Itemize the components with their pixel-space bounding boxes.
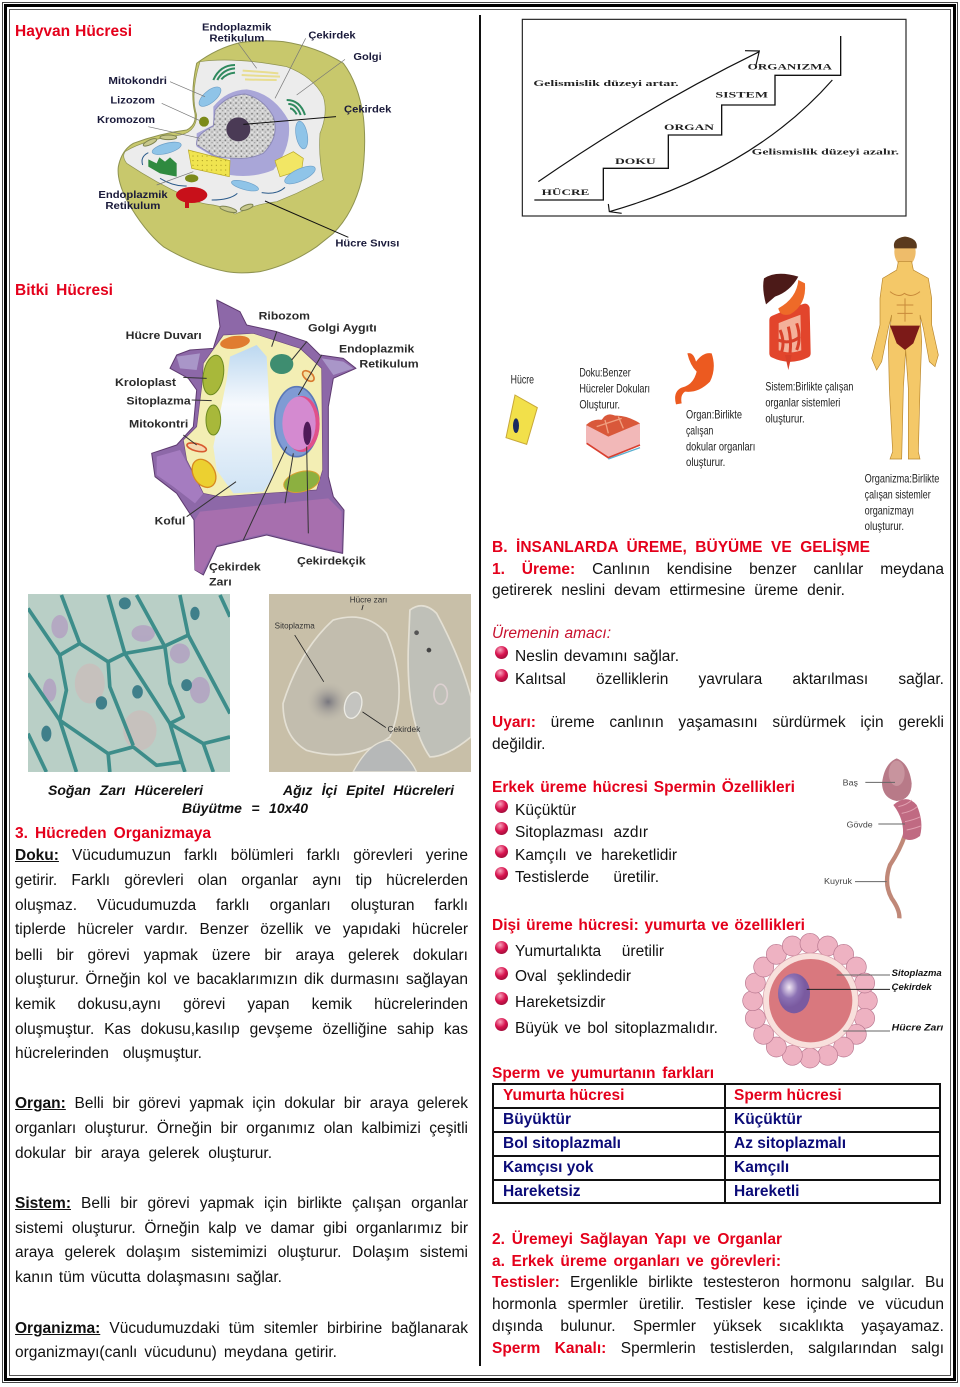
text block: Doku: kemik dokusu,aynı görevi yapan kemik hücrelerinden (15, 996, 468, 1013)
text block: Testisler: hormonla spermler üretilir. Testisler kese içinde ve vücudun (492, 1296, 944, 1313)
photo: cheek epithelial cells: Hücre zarı (350, 594, 387, 604)
text block: Sistem (15, 1195, 468, 1286)
level labels: dokular organları (686, 440, 755, 454)
head (882, 758, 912, 801)
table: sperm and egg differences: Büyüktür (503, 1111, 571, 1128)
cytoplasm (124, 60, 325, 214)
labels: Endoplazmik (98, 190, 168, 201)
sperm labels (855, 782, 905, 882)
heading: egg features: Dişi üreme hücresi: yumurta ve özellikleri (492, 917, 805, 934)
level labels: Oluşturur. (579, 397, 620, 411)
level labels: oluşturur. (765, 411, 805, 425)
stomach (675, 353, 714, 404)
labels: Çekirdekçik (297, 555, 366, 567)
caption: photos: Soğan Zarı Hücereleri (48, 782, 203, 798)
heading: 3. Hücreden Organizmaya: 3. Hücreden Organizmaya (15, 825, 211, 842)
photo: cheek epithelial cells: Çekirdek (388, 724, 421, 734)
list: sperm features: Testislerde üretilir. (515, 869, 659, 886)
follicle cells (743, 933, 877, 1068)
text block: Doku: oluşmuştur. Kas dokusu,kasılıp gevşeme özelliğine sahip kas (15, 1021, 468, 1038)
caption: photos: Büyütme = 10x40 (182, 800, 308, 816)
text block: Testisler (492, 1274, 944, 1357)
labels: Hücre Sıvısı (335, 239, 400, 250)
labels: Golgi (353, 52, 382, 63)
tissue (586, 414, 640, 459)
stair labels: DOKU (615, 157, 656, 166)
labels: Sitoplazma (126, 395, 191, 407)
heading: B. İnsanlarda üreme: B. İNSANLARDA ÜREME, BÜYÜME VE GELİŞME (492, 539, 870, 556)
text block: Organ: dokular bir araya gelerek oluşturur. (15, 1145, 272, 1162)
stair labels: ORGANIZMA (748, 62, 832, 71)
heading: sperm features: Erkek üreme hücresi Spermin Özellikleri (492, 779, 795, 796)
text block: Organ: organları oluşturur. Örneğin bir organımız olan kalbimizi çeşitli (15, 1120, 468, 1137)
list: egg features: Hareketsizdir (515, 994, 605, 1011)
caption: photos (48, 782, 454, 816)
stair labels: Gelismislik düzeyi artar. (533, 79, 679, 88)
table: sperm and egg differences (492, 1083, 941, 1204)
table: sperm and egg differences: Sperm hücresi (734, 1087, 842, 1104)
text block: Uyarı (492, 714, 944, 753)
nucleus (197, 89, 289, 176)
text block: Uyarı: Uyarı: üreme canlının yaşamasını sürdürmek için gerekli (492, 714, 944, 731)
labels: Ribozom (259, 310, 310, 322)
cell (506, 395, 537, 444)
text block: Doku: oluşmaz. Vücudumuzda farklı organları oluşturan farklı (15, 897, 468, 914)
labels: Çekirdek (308, 30, 356, 41)
labels: Çekirdek (344, 104, 392, 115)
leader lines (148, 38, 345, 185)
text block: Doku: getirir. Farklı görevleri olan organlar aynı tip hücrelerden (15, 872, 468, 889)
labels: Çekirdek (209, 561, 261, 573)
diagram: sperm cell: Kuyruk (824, 876, 853, 886)
heading: Hayvan Hücresi: Hayvan Hücresi (15, 23, 132, 40)
photo: cheek epithelial cells (269, 594, 471, 772)
labels: Retikulum (209, 33, 264, 44)
labels: Endoplazmik (202, 23, 272, 34)
stair labels (533, 62, 899, 197)
text block: Doku: oluşturur. Örneğin kol ve bacaklarımızın dik durmasını sağlayan (15, 971, 468, 988)
labels: Mitokontri (129, 419, 188, 431)
table: sperm and egg differences: Bol sitoplazmalı (503, 1135, 621, 1152)
text block: Sistem: Sistem: Belli bir görevi yapmak için birlikte çalışan organlar (15, 1195, 468, 1212)
text block: Üreme: 1. Üreme: Canlının kendisine benzer canlılar meydana (492, 561, 944, 578)
level labels: oluşturur. (686, 455, 725, 469)
text block: Organ (15, 1095, 468, 1162)
diagram: development stairs (522, 18, 907, 217)
labels: Kroloplast (115, 377, 176, 389)
level labels: Hücreler Dokuları (579, 381, 650, 395)
diagram: plant cell (115, 300, 419, 588)
table: sperm and egg differences: Yumurta hücresi (503, 1087, 624, 1104)
table: sperm and egg differences: Küçüktür (734, 1111, 802, 1128)
text block: Organizma: organizmayı(canlı vücudunu) meydana getirir. (15, 1344, 337, 1361)
list: egg features (495, 941, 718, 1037)
labels: Endoplazmik (339, 344, 415, 356)
organelles (142, 65, 318, 214)
text block: Sistem: kanın tüm vücutta dolaşmasını sağlar. (15, 1269, 282, 1286)
diagram: egg cell: Çekirdek (892, 982, 933, 992)
level labels: organlar sistemleri (765, 395, 840, 409)
diagram: cell to organism levels (505, 236, 940, 533)
labels: Koful (155, 516, 185, 528)
arrow down (608, 80, 832, 213)
egg labels (837, 975, 890, 1031)
text block: Üreme (492, 560, 944, 599)
tail (887, 835, 905, 918)
arrow up (538, 51, 759, 182)
text block: Sistem: sistemi oluşturur. Örneğin kalp ve damar gibi organlarımız bir (15, 1220, 468, 1237)
list: egg features: Yumurtalıkta üretilir (515, 943, 664, 960)
stair labels: SISTEM (715, 91, 769, 100)
midpiece (893, 799, 921, 840)
text block: Testisler: dışında bulunur. Spermler yüksek sıcaklıkta yaşayamaz. (492, 1318, 944, 1335)
text block: Organ: Organ: Belli bir görevi yapmak için dokular bir araya gelerek (15, 1095, 468, 1112)
text block: Doku: hücrelerinden oluşmuştur. (15, 1045, 202, 1062)
cell body (118, 41, 365, 273)
diagram: egg cell: Hücre Zarı (892, 1023, 944, 1033)
list: egg features: Büyük ve bol sitoplazmalıdır. (515, 1020, 718, 1037)
list: sperm features (495, 800, 677, 886)
photo: onion skin cells (28, 594, 230, 772)
subheading: Üremenin amacı: Üremenin amacı: (492, 625, 611, 642)
list: purpose of reproduction: Kalıtsal özelliklerin yavrulara aktarılması sağlar. (515, 671, 944, 688)
text block: Testisler: Sperm Kanalı: Spermlerin testislerden, salgılarından salgı (492, 1340, 944, 1357)
list: egg features: Oval şeklindedir (515, 968, 631, 985)
level labels: organizmayı (865, 504, 914, 518)
stair labels: HÜCRE (542, 188, 589, 197)
stairs (534, 36, 841, 200)
labels: Mitokondri (108, 76, 167, 87)
table: sperm and egg differences: Kamçılı (734, 1159, 789, 1176)
diagram: sperm cell: Gövde (847, 819, 873, 829)
labels: Lizozom (110, 95, 155, 106)
table: sperm and egg differences: Hareketsiz (503, 1183, 581, 1200)
level labels: Organizma:Birlikte (865, 472, 940, 486)
membrane and cytoplasm (763, 953, 858, 1048)
photo: cheek epithelial cells: Sitoplazma (275, 620, 315, 630)
level labels: Doku:Benzer (579, 365, 631, 379)
text block: Sistem: araya gelerek dolaşım sistemimizi oluşturur. Dolaşım sistemi (15, 1244, 468, 1261)
list: purpose of reproduction (495, 646, 944, 688)
labels (97, 23, 400, 250)
table: sperm and egg differences: Az sitoplazmalı (734, 1135, 846, 1152)
text block: Doku: belli bir görevi yapmak üzere bir araya gelerek dokuları (15, 947, 468, 964)
heading: reproductive organs: 2. Üremeyi Sağlayan Yapı ve Organlar (492, 1231, 782, 1248)
text block: Üreme: getirerek neslini devam ettirmesine üreme denir. (492, 582, 845, 599)
cell wall (152, 300, 356, 575)
heading: reproductive organs (492, 1230, 782, 1270)
heading: sperm and egg differences: Sperm ve yumurtanın farkları (492, 1065, 714, 1082)
caption: photos: Ağız İçi Epitel Hücreleri (283, 782, 454, 798)
level labels: oluşturur. (865, 519, 904, 533)
text block: Doku: tiplerde hücreler vardır. Benzer özellik ve yapıdaki hücreler (15, 921, 468, 938)
level labels: Hücre (511, 373, 534, 387)
level labels: Organ:Birlikte (686, 408, 742, 422)
labels: Hücre Duvarı (126, 330, 202, 342)
list: sperm features: Kamçılı ve hareketlidir (515, 847, 677, 864)
leader lines (183, 332, 322, 540)
level labels: Sistem:Birlikte çalışan (765, 379, 853, 393)
diagram: egg cell: Sitoplazma (892, 968, 942, 978)
diagram: sperm cell: Baş (843, 777, 859, 787)
level labels: çalışan sistemler (865, 488, 931, 502)
wall highlights (157, 353, 353, 573)
list: sperm features: Küçüktür (515, 802, 576, 819)
heading: reproductive organs: a. Erkek üreme organları ve görevleri: (492, 1253, 781, 1270)
list: purpose of reproduction: Neslin devamını sağlar. (515, 648, 679, 665)
labels: Golgi Aygıtı (308, 323, 377, 335)
nucleus (778, 973, 810, 1013)
text block: Doku (15, 847, 468, 1062)
text block: Uyarı: değildir. (492, 736, 545, 753)
digestive system (763, 274, 806, 370)
labels: Retikulum (359, 358, 419, 370)
list: sperm features: Sitoplazması azdır (515, 824, 648, 841)
column divider (479, 15, 481, 1366)
vacuole (213, 345, 273, 493)
organelles (186, 334, 322, 496)
labels (115, 310, 419, 588)
stair labels: ORGAN (664, 123, 714, 132)
table: sperm and egg differences: Hareketli (734, 1183, 799, 1200)
text block: Doku: Doku: Vücudumuzun farklı bölümleri farklı görevleri yerine (15, 847, 468, 864)
table: sperm and egg differences: Kamçısı yok (503, 1159, 593, 1176)
diagram: egg cell (742, 933, 944, 1068)
human body (872, 237, 938, 459)
stair labels: Gelismislik düzeyi azalır. (752, 148, 899, 157)
diagram: sperm cell (824, 758, 922, 918)
cytoplasm (183, 333, 323, 497)
text block: Organizma (15, 1320, 468, 1361)
labels: Zarı (209, 576, 232, 588)
text block: Organizma: Organizma: Vücudumuzdaki tüm sitemler birbirine bağlanarak (15, 1320, 468, 1337)
diagram: animal cell (97, 23, 400, 274)
labels: Retikulum (105, 201, 160, 212)
labels: Kromozom (97, 115, 155, 126)
heading: Bitki Hücresi: Bitki Hücresi (15, 282, 113, 299)
level labels: çalışan (686, 424, 713, 438)
level labels (511, 365, 940, 533)
text block: Testisler: Testisler: Ergenlikle birlikte testesteron hormonu salgılar. Bu (492, 1274, 944, 1291)
